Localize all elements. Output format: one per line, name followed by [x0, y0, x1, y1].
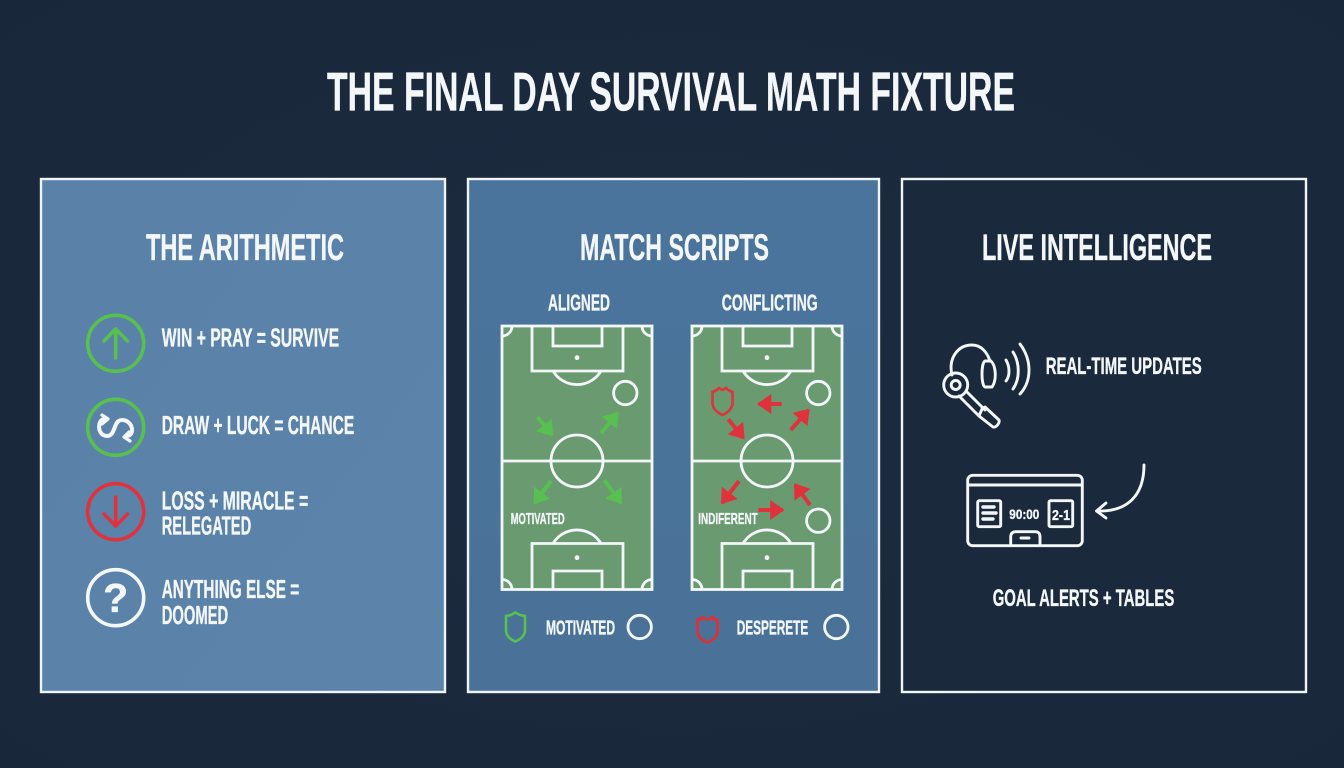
panel: live intelligence [902, 179, 1306, 692]
label: indiferent on pitch: INDIFERENT [698, 511, 758, 528]
label: motivated on pitch: MOTIVATED [511, 511, 565, 528]
icon: question mark: ? [103, 575, 128, 621]
pitch: aligned [501, 325, 653, 590]
text: relegated: RELEGATED [162, 510, 251, 540]
icon: scoreboard [968, 475, 1082, 546]
panel: the arithmetic [41, 179, 445, 692]
label: aligned: ALIGNED [548, 290, 610, 316]
arrows: aligned [534, 413, 621, 503]
icon: scoreboard: 2-1 [1052, 507, 1070, 524]
arrows: conflicting [722, 404, 810, 510]
legend: desperete: DESPERETE [737, 617, 808, 639]
icon: scoreboard: 90:00 [1009, 506, 1039, 522]
icon: question mark [88, 570, 144, 626]
text: anything else: ANYTHING ELSE = [162, 574, 299, 604]
pitch: conflicting [691, 325, 843, 590]
text: win: WIN + PRAY = SURVIVE [162, 322, 339, 352]
icon: headset [944, 344, 1029, 427]
icon: red shield on pitch [712, 388, 732, 415]
player circle [614, 381, 637, 405]
arrow: curved to scoreboard [1096, 465, 1144, 518]
icon: down arrow [88, 484, 144, 540]
panel: match scripts [468, 179, 879, 692]
heading: match scripts: MATCH SCRIPTS [580, 227, 769, 268]
label: conflicting: CONFLICTING [722, 290, 818, 316]
legend: motivated: MOTIVATED [546, 617, 615, 639]
player circles [807, 381, 830, 532]
heading: live intelligence: LIVE INTELLIGENCE [982, 227, 1212, 268]
text: real-time updates: REAL-TIME UPDATES [1046, 353, 1202, 380]
legend: desperete [698, 615, 848, 642]
heading: the arithmetic: THE ARITHMETIC [146, 227, 344, 268]
text: goal alerts + tables: GOAL ALERTS + TABLES [993, 585, 1174, 612]
text: loss: LOSS + MIRACLE = [162, 486, 308, 516]
icon: swap arrows [88, 399, 144, 455]
text: draw: DRAW + LUCK = CHANCE [162, 410, 354, 440]
legend: motivated [506, 612, 651, 642]
text: doomed: DOOMED [162, 600, 228, 630]
icon: up arrow [88, 315, 144, 371]
